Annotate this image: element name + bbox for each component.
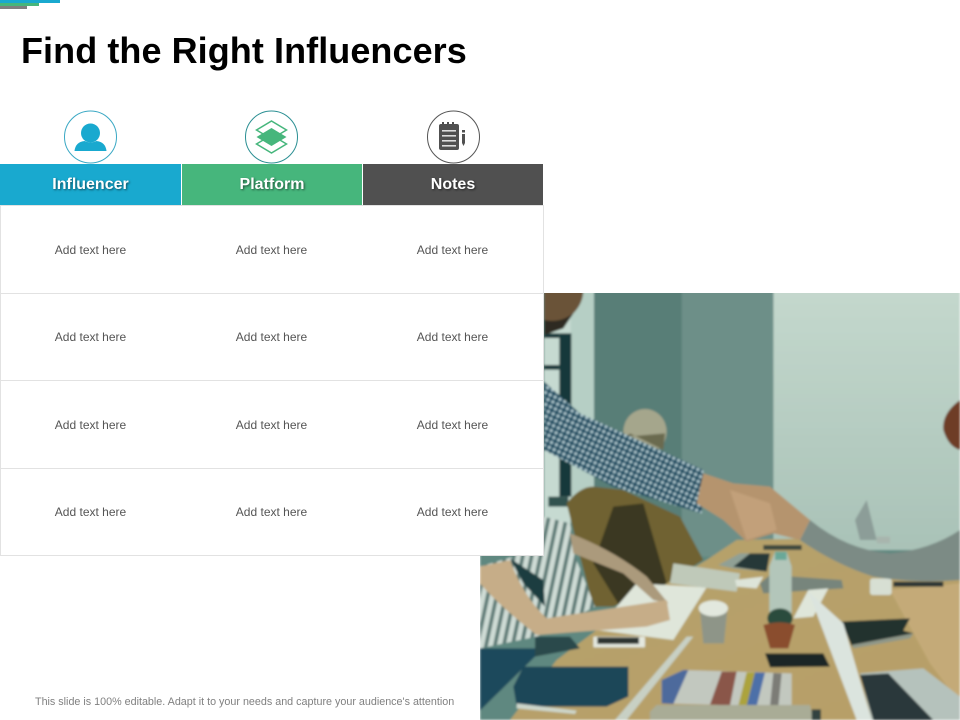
icon: influencer person <box>64 110 117 164</box>
paper <box>597 583 707 640</box>
phone left <box>593 637 645 647</box>
coffee cup <box>700 610 727 643</box>
row 4 text: Add text here <box>417 505 488 519</box>
header: notes: Notes <box>431 176 475 193</box>
dark notebook <box>842 618 913 646</box>
phone right <box>765 653 830 667</box>
header: influencer: Influencer <box>52 176 129 193</box>
footer note: This slide is 100% editable. Adapt it to your needs and capture your audience's attention <box>35 696 454 708</box>
row 3 text: Add text here <box>236 418 307 432</box>
paper stacks <box>670 563 740 592</box>
header: influencer <box>0 164 181 205</box>
row 2 text: Add text here <box>417 330 488 344</box>
icon: platform layers <box>245 110 298 164</box>
header: platform: Platform <box>240 176 304 193</box>
decorative corner bars <box>0 0 60 9</box>
row 2 text: Add text here <box>55 330 126 344</box>
near laptop <box>718 553 770 572</box>
row 4 text <box>54 505 488 519</box>
table <box>0 164 544 556</box>
row 2 text: Add text here <box>236 330 307 344</box>
cactus pot <box>767 608 793 628</box>
white napkin <box>793 588 828 618</box>
table body <box>0 205 544 556</box>
blue notebook <box>513 667 628 707</box>
standing man head <box>544 290 583 335</box>
hands <box>697 473 810 542</box>
water bottle <box>769 552 792 618</box>
title: Find the Right Influencers <box>21 30 467 71</box>
row 2 text <box>54 330 488 344</box>
header: notes <box>363 164 543 205</box>
row 3 text: Add text here <box>55 418 126 432</box>
far laptop <box>855 500 877 540</box>
open laptop <box>860 668 960 720</box>
photo: handshake at meeting table <box>480 293 960 720</box>
row 3 text: Add text here <box>417 418 488 432</box>
bottom tablet <box>650 705 813 720</box>
silver strip <box>615 637 693 720</box>
table <box>510 538 960 720</box>
hair right <box>943 400 960 450</box>
row 3 text <box>54 418 488 432</box>
striped box <box>662 670 792 707</box>
row 1 text: Add text here <box>236 243 307 257</box>
header: platform <box>182 164 362 205</box>
row 4 text: Add text here <box>236 505 307 519</box>
row 1 text <box>54 243 488 257</box>
seated woman <box>480 517 595 648</box>
row 4 text: Add text here <box>55 505 126 519</box>
sleeve arm <box>544 382 703 513</box>
row 1 text: Add text here <box>417 243 488 257</box>
walls <box>480 290 960 720</box>
right cup and dark device <box>870 578 892 595</box>
woman arms <box>570 533 668 603</box>
seated man <box>567 487 703 607</box>
icon: notes notepad <box>427 110 480 164</box>
grey arm <box>800 520 960 581</box>
row 1 text: Add text here <box>55 243 126 257</box>
